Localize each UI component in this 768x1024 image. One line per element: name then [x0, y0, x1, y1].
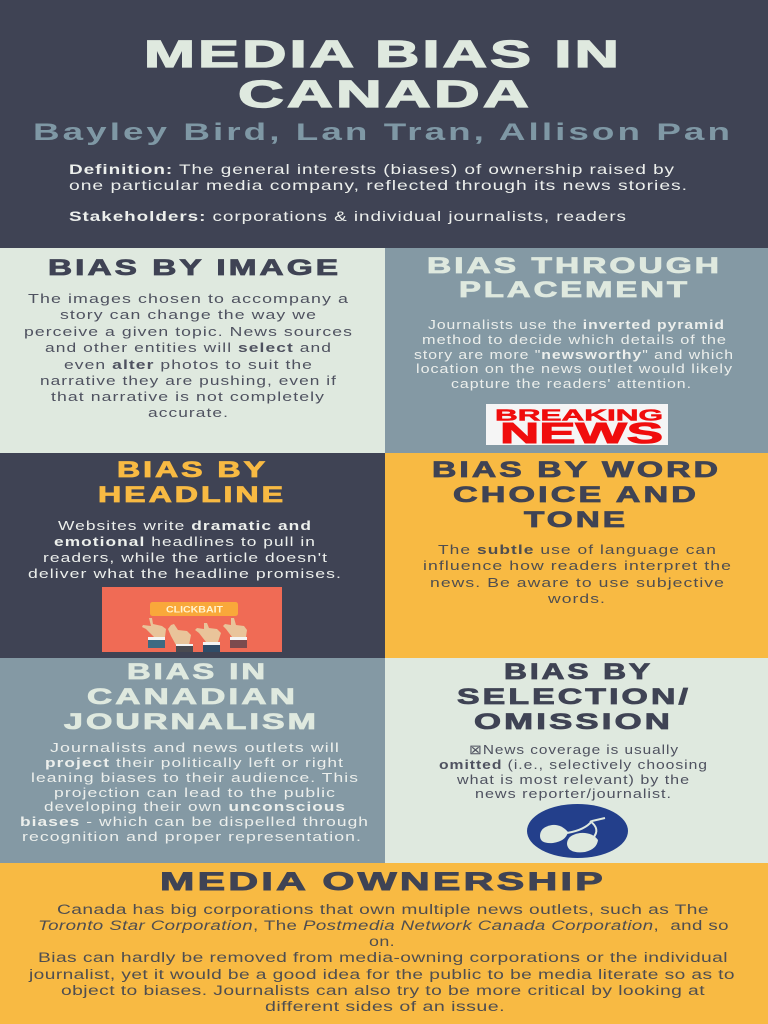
heading: bias by headline: BIAS BY	[117, 457, 268, 482]
body: media ownership	[28, 902, 735, 1014]
body: selection omission: news reporter/journalist.	[475, 786, 672, 801]
icon: pointing hand 2	[168, 624, 193, 652]
body: bias by image: perceive a given topic. News sources	[24, 324, 353, 339]
body: canadian journalism: project their politically left or right	[45, 755, 344, 770]
body: bias by image: The images chosen to accompany a	[28, 291, 349, 306]
body: media ownership: Bias can hardly be removed from media-owning corporations or the individual	[38, 950, 728, 965]
body: bias by headline: readers, while the article doesn't	[43, 550, 328, 565]
body: selection omission	[439, 742, 708, 801]
panel: bias by selection / omission	[385, 658, 768, 863]
title: CANADA	[238, 74, 532, 116]
panel: header	[0, 0, 768, 248]
body: bias by headline: emotional headlines to pull in	[54, 534, 316, 549]
body: canadian journalism	[20, 740, 369, 844]
body: bias by headline: deliver what the headline promises.	[28, 566, 342, 581]
heading: selection omission: BIAS BY	[504, 659, 653, 684]
definition text: one particular media company, reflected through its news stories.	[69, 177, 688, 193]
stakeholders text: Stakeholders: corporations & individual journalists, readers	[69, 208, 627, 224]
icon: cherries in blue circle	[527, 804, 628, 858]
body: bias through placement: method to decide which details of the	[422, 332, 727, 347]
definition text: Definition: The general interests (biases) of ownership raised by	[69, 161, 675, 177]
body: bias by headline: Websites write dramatic and	[58, 518, 312, 533]
body: bias through placement: capture the readers' attention.	[451, 376, 692, 391]
body: word choice and tone: words.	[547, 591, 606, 606]
body: media ownership: object to biases. Journalists can also try to be more critical by looking at	[61, 983, 705, 998]
body: canadian journalism: leaning biases to their audience. This	[31, 770, 359, 785]
definition text	[69, 161, 688, 193]
panel: bias through placement	[385, 248, 768, 453]
body: canadian journalism: recognition and proper representation.	[22, 829, 362, 844]
panel: bias by word choice and tone	[385, 453, 768, 658]
body: bias through placement	[414, 317, 734, 391]
clickbait button	[150, 602, 238, 616]
heading: word choice and tone: CHOICE AND	[453, 482, 699, 507]
body: bias through placement: location on the news outlet would likely	[416, 361, 733, 376]
image: clickbait illustration	[102, 587, 282, 652]
heading: bias through placement: PLACEMENT	[459, 277, 690, 302]
body: bias by image: accurate.	[148, 405, 229, 420]
body: word choice and tone: news. Be aware to use subjective	[430, 575, 725, 590]
image: breaking news banner	[486, 404, 668, 450]
heading: canadian journalism: BIAS IN	[127, 659, 268, 684]
body: bias by image	[24, 291, 353, 420]
body: bias through placement: story are more " newsworthy " and which	[414, 347, 734, 362]
heading: selection omission	[457, 659, 691, 734]
heading: bias through placement	[427, 253, 722, 302]
image: breaking news banner: BREAKING	[495, 408, 663, 424]
body: word choice and tone: The subtle use of language can	[438, 542, 717, 557]
heading: media ownership: MEDIA OWNERSHIP	[160, 868, 606, 896]
panel: media ownership	[0, 863, 768, 1024]
image: breaking news banner: NEWS	[500, 418, 663, 450]
heading: word choice and tone: TONE	[524, 507, 628, 532]
body: canadian journalism: biases - which can be dispelled through	[20, 814, 369, 829]
body: bias by image: even alter photos to suit the	[64, 357, 313, 372]
body: media ownership: different sides of an issue.	[265, 999, 505, 1014]
body: word choice and tone: influence how readers interpret the	[423, 558, 732, 573]
title	[144, 34, 622, 116]
authors: Bayley Bird, Lan Tran, Allison Pan	[33, 119, 733, 146]
body: media ownership: on.	[369, 934, 395, 949]
heading: selection omission: OMISSION	[474, 709, 673, 734]
body: word choice and tone	[423, 542, 732, 606]
body: selection omission: omitted (i.e., selectively choosing	[439, 757, 708, 772]
heading: word choice and tone	[432, 457, 721, 532]
icon: pointing hand 4	[223, 618, 247, 648]
body: bias by image: story can change the way we	[60, 307, 317, 322]
heading: bias by headline: HEADLINE	[98, 482, 286, 507]
body: bias through placement: Journalists use the inverted pyramid	[428, 317, 725, 332]
body: selection omission: ⊠News coverage is usually	[469, 742, 679, 757]
body: bias by image: narrative they are pushing, even if	[40, 373, 337, 388]
heading: bias through placement: BIAS THROUGH	[427, 253, 722, 278]
heading: canadian journalism	[64, 659, 319, 734]
heading: bias by image: BIAS BY IMAGE	[48, 255, 341, 280]
title: MEDIA BIAS IN	[144, 34, 622, 76]
panel: bias in canadian journalism	[0, 658, 385, 863]
body: bias by headline	[28, 518, 342, 581]
body: media ownership: Toronto Star Corporation , The Postmedia Network Canada Corporation , and so	[38, 918, 729, 933]
body: media ownership: journalist, yet it would be a good idea for the public to be media literate so as to	[28, 967, 735, 982]
body: media ownership: Canada has big corporations that own multiple news outlets, such as The	[57, 902, 709, 917]
panel: bias by headline	[0, 453, 385, 658]
body: canadian journalism: Journalists and news outlets will	[50, 740, 340, 755]
panel: bias by image	[0, 248, 385, 453]
heading: bias by headline	[98, 457, 286, 507]
heading: selection omission: SELECTION/	[457, 684, 691, 709]
body: selection omission: what is most relevant) by the	[456, 772, 690, 787]
body: canadian journalism: developing their own unconscious	[44, 799, 346, 814]
body: bias by image: and other entities will select and	[45, 340, 332, 355]
body: bias by image: that narrative is not completely	[51, 389, 325, 404]
heading: word choice and tone: BIAS BY WORD	[432, 457, 721, 482]
heading: canadian journalism: CANADIAN	[87, 684, 298, 709]
icon: pointing hand 1	[142, 618, 166, 648]
clickbait button: CLICKBAIT	[166, 604, 223, 616]
body: canadian journalism: projection can lead to the public	[54, 785, 336, 800]
icon: pointing hand 3	[195, 623, 221, 652]
heading: canadian journalism: JOURNALISM	[64, 709, 319, 734]
